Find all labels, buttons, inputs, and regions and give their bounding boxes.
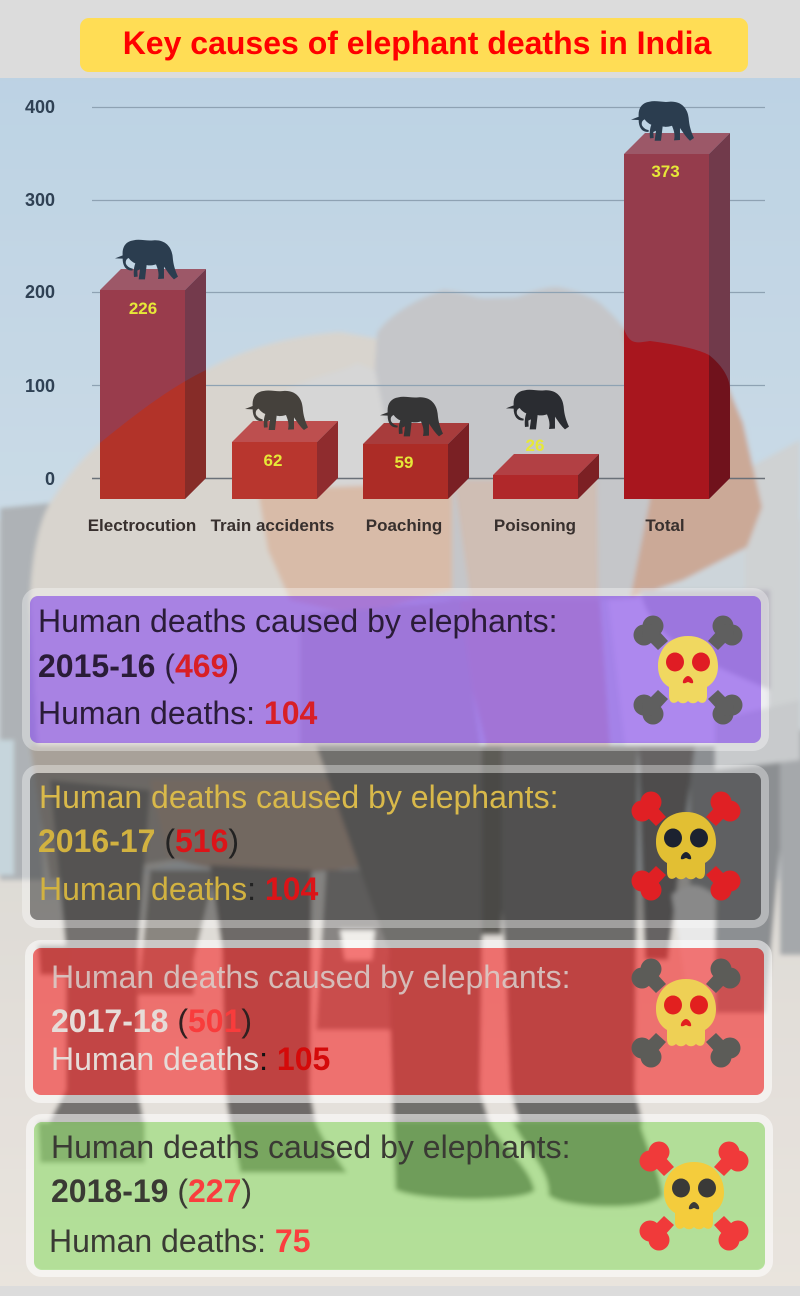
bar chart: [100, 133, 730, 499]
bar value labels: [129, 162, 680, 472]
y axis labels: [25, 97, 55, 489]
feet in green panel: [38, 1122, 145, 1163]
elephant body: [30, 332, 390, 900]
icon: elephant Electrocution: [115, 240, 178, 279]
bar value labels: 59: [395, 453, 413, 472]
legs: [45, 780, 150, 1130]
category labels: [88, 516, 685, 535]
panel: 2016-17: Human deaths caused by elephants:: [39, 779, 558, 815]
icon: elephant Total: [631, 101, 694, 141]
icon: elephant Train accidents: [245, 390, 308, 430]
icon: skull and crossbones: [634, 616, 742, 724]
icon: skull and crossbones: [632, 958, 740, 1068]
y axis labels: 400: [25, 97, 55, 117]
trunk: [455, 480, 599, 596]
y axis labels: 0: [45, 469, 55, 489]
panel: 2018-19: Human deaths caused by elephants:: [51, 1129, 570, 1165]
category labels: Electrocution: [88, 516, 196, 535]
panel: 2016-17: Human deaths: 104: [39, 871, 318, 907]
category labels: Poisoning: [494, 516, 576, 535]
y axis labels: 100: [25, 376, 55, 396]
distant trees and neighbouring elephants: [752, 442, 800, 524]
bar: Poaching 59: [363, 423, 469, 499]
panel: 2017-18: Human deaths: 105: [51, 1041, 330, 1077]
panel: 2016-17: 2016-17 (516): [38, 823, 239, 859]
panel: 2018-19: [30, 1118, 769, 1273]
gridlines: [92, 108, 765, 478]
panel: 2015-16: Human deaths caused by elephants:: [38, 603, 557, 639]
category labels: Total: [645, 516, 685, 535]
panel: 2018-19: 2018-19 (227): [51, 1173, 252, 1209]
panel: 2015-16: [26, 592, 765, 747]
icon: skull and crossbones: [632, 792, 740, 900]
right ear: [621, 327, 764, 598]
y axis labels: 300: [25, 190, 55, 210]
panel: 2018-19: Human deaths: 75: [49, 1223, 310, 1259]
bar: Total 373: [624, 133, 730, 499]
bar: Poisoning 26: [493, 454, 599, 499]
head: [360, 287, 650, 600]
title banner: [80, 18, 748, 72]
bar value labels: 26: [526, 436, 544, 455]
category labels: Poaching: [366, 516, 442, 535]
bar value labels: 62: [264, 451, 282, 470]
icon: skull and crossbones: [640, 1142, 748, 1250]
panel: 2017-18: Human deaths caused by elephants:: [51, 959, 570, 995]
bar value labels: 226: [129, 299, 157, 318]
panel: 2017-18: [29, 944, 768, 1099]
bar value labels: 373: [651, 162, 680, 181]
icon: elephant Poisoning: [506, 390, 569, 429]
bar: Train accidents 62: [232, 421, 338, 499]
elephant icons on bars: [115, 101, 694, 436]
panel: 2015-16: 2015-16 (469): [38, 648, 239, 684]
y axis labels: 200: [25, 282, 55, 302]
title: Key causes of elephant deaths in India: [123, 25, 712, 61]
left ear: [336, 374, 386, 484]
panel: 2015-16: Human deaths: 104: [38, 695, 318, 731]
category labels: Train accidents: [211, 516, 334, 535]
bar: Electrocution 226: [100, 269, 206, 499]
panel: 2016-17: [26, 769, 765, 924]
panel: 2017-18: 2017-18 (501): [51, 1003, 252, 1039]
icon: elephant Poaching: [380, 397, 443, 436]
